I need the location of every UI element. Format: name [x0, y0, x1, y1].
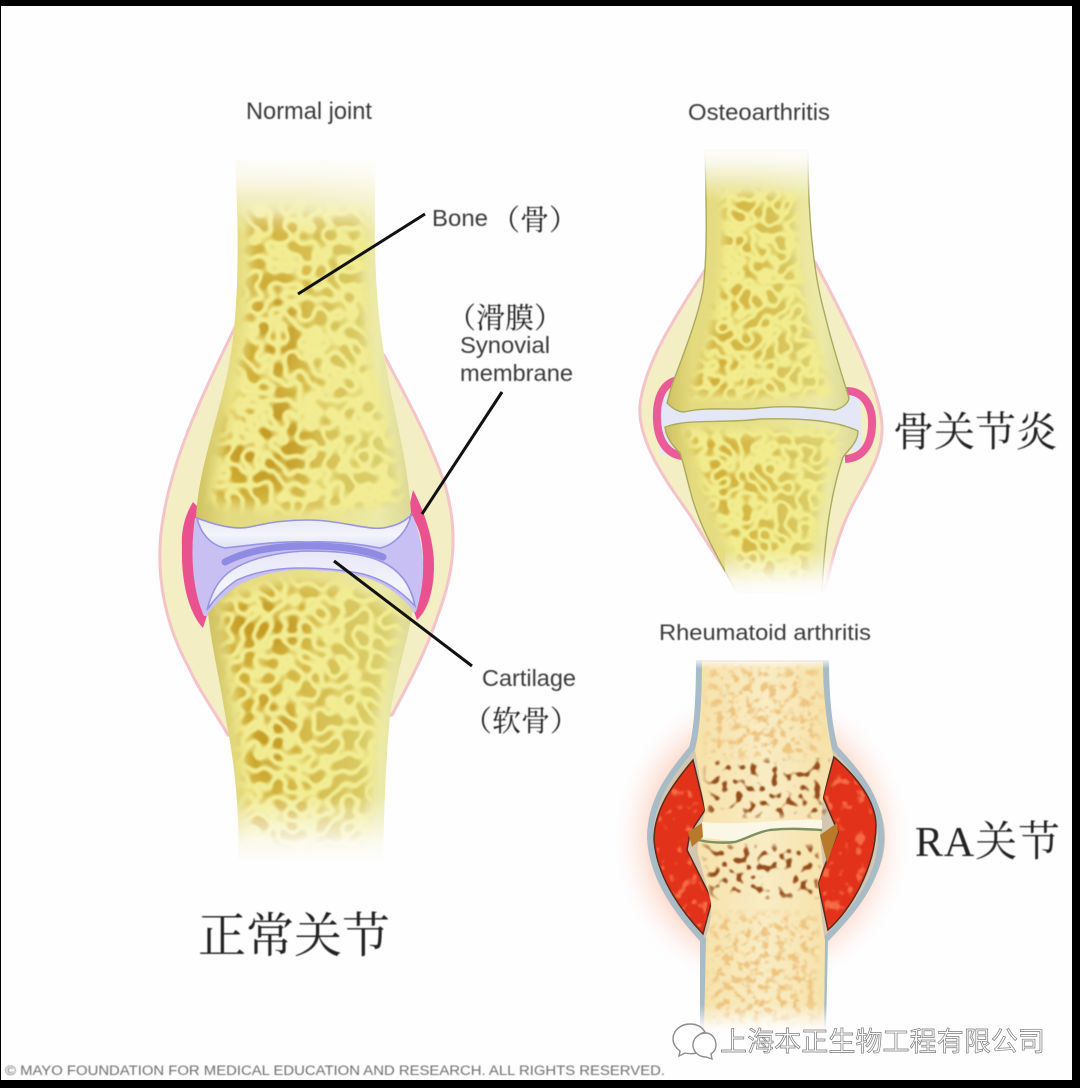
lower bone: [208, 570, 413, 860]
fade: top of osteoarthritis bone: [695, 145, 820, 200]
caption: osteoarthritis: 骨关节炎: [893, 409, 1058, 455]
label: cartilage: （软骨）: [463, 705, 579, 738]
label: synovial membrane: （滑膜）: [447, 302, 563, 335]
cartilage: lower: [207, 551, 415, 610]
heading: osteoarthritis: Osteoarthritis: [688, 99, 830, 125]
label: synovial membrane: membrane: [460, 360, 573, 386]
synovial membrane: right: [845, 391, 872, 459]
caption: RA joint: RA关节: [915, 819, 1060, 866]
illustration: normal joint: [160, 150, 453, 865]
label: cartilage: [463, 665, 579, 738]
synovial membrane: left: [657, 380, 682, 456]
eroded marrow: lower: [700, 846, 818, 898]
capsule outline: right: [823, 660, 881, 1030]
synovial membrane: left: [182, 502, 208, 628]
pale marrow: lower: [710, 915, 816, 1027]
leader line: cartilage: [334, 561, 472, 666]
cell colour: upper osteoarthritis bone: [694, 195, 826, 394]
heading: normal joint: Normal joint: [246, 98, 372, 125]
erosion: right: [820, 823, 838, 863]
upper bone: osteoarthritis: [667, 150, 849, 412]
caption: normal joint: 正常关节: [198, 910, 390, 963]
capsule: normal joint: [160, 325, 453, 735]
fade: bottom of osteoarthritis bone: [725, 550, 835, 596]
pale marrow: upper: [708, 668, 820, 758]
fade: top of bone: [215, 150, 395, 235]
lower bone: osteoarthritis: [665, 419, 858, 592]
label: synovial membrane: Synovial: [460, 332, 550, 358]
copyright line: © MAYO FOUNDATION FOR MEDICAL EDUCATION AND RESEARCH. ALL RIGHTS RESERVED.: [5, 1063, 665, 1078]
pannus: right: [818, 757, 876, 930]
inflammation glow: [616, 686, 908, 990]
illustration: osteoarthritis: [640, 145, 882, 596]
lower bone spongy texture: [220, 578, 404, 850]
label: cartilage: Cartilage: [482, 665, 576, 691]
label: bone: （骨）: [491, 205, 578, 237]
cavity shadow line: [225, 546, 383, 562]
upper bone: [196, 160, 411, 528]
fade: bottom of bone: [215, 795, 405, 865]
bone: rheumatoid arthritis: [695, 662, 833, 1032]
watermark text: 上海本正生物工程有限公司: [720, 1027, 1045, 1057]
pannus highlights: left: [656, 762, 708, 930]
label: bone: [432, 205, 578, 237]
leader line: bone: [298, 214, 425, 294]
heading: rheumatoid arthritis: Rheumatoid arthritis: [659, 620, 871, 645]
upper bone cell colour: [216, 215, 396, 508]
label: synovial membrane: [447, 302, 573, 386]
illustration: rheumatoid arthritis: [616, 655, 908, 1035]
leader line: synovial membrane: [422, 392, 502, 514]
pannus: left: [654, 760, 712, 934]
joint space: [660, 392, 862, 455]
label: bone: Bone: [432, 205, 488, 231]
cartilage: upper: [197, 515, 411, 548]
pannus highlights: right: [820, 759, 874, 927]
joint capsule fill: [648, 660, 885, 1030]
upper bone spongy texture: [210, 205, 402, 514]
upper bone gold shading: [228, 280, 308, 488]
synovial membrane: right: [408, 490, 434, 620]
upper bone texture: osteoarthritis: [688, 190, 832, 401]
eroded marrow: upper: [706, 760, 832, 816]
capsule outline: left: [650, 660, 703, 1030]
capsule: osteoarthritis: [640, 262, 882, 592]
joint cavity: [192, 516, 423, 616]
fade: top of bone: [692, 655, 834, 669]
joint gap: [698, 829, 822, 843]
fade: bottom of bone: [695, 1005, 830, 1035]
lower bone gold shading: [232, 599, 308, 777]
icon: chat bubbles: [673, 1024, 716, 1059]
joint gap highlight: [700, 820, 822, 841]
cell colour: lower osteoarthritis bone: [690, 434, 835, 575]
erosion: left: [688, 823, 703, 847]
watermark: [673, 1024, 1045, 1059]
lower bone cell colour: [226, 584, 398, 845]
lower bone texture: osteoarthritis: [682, 428, 845, 585]
